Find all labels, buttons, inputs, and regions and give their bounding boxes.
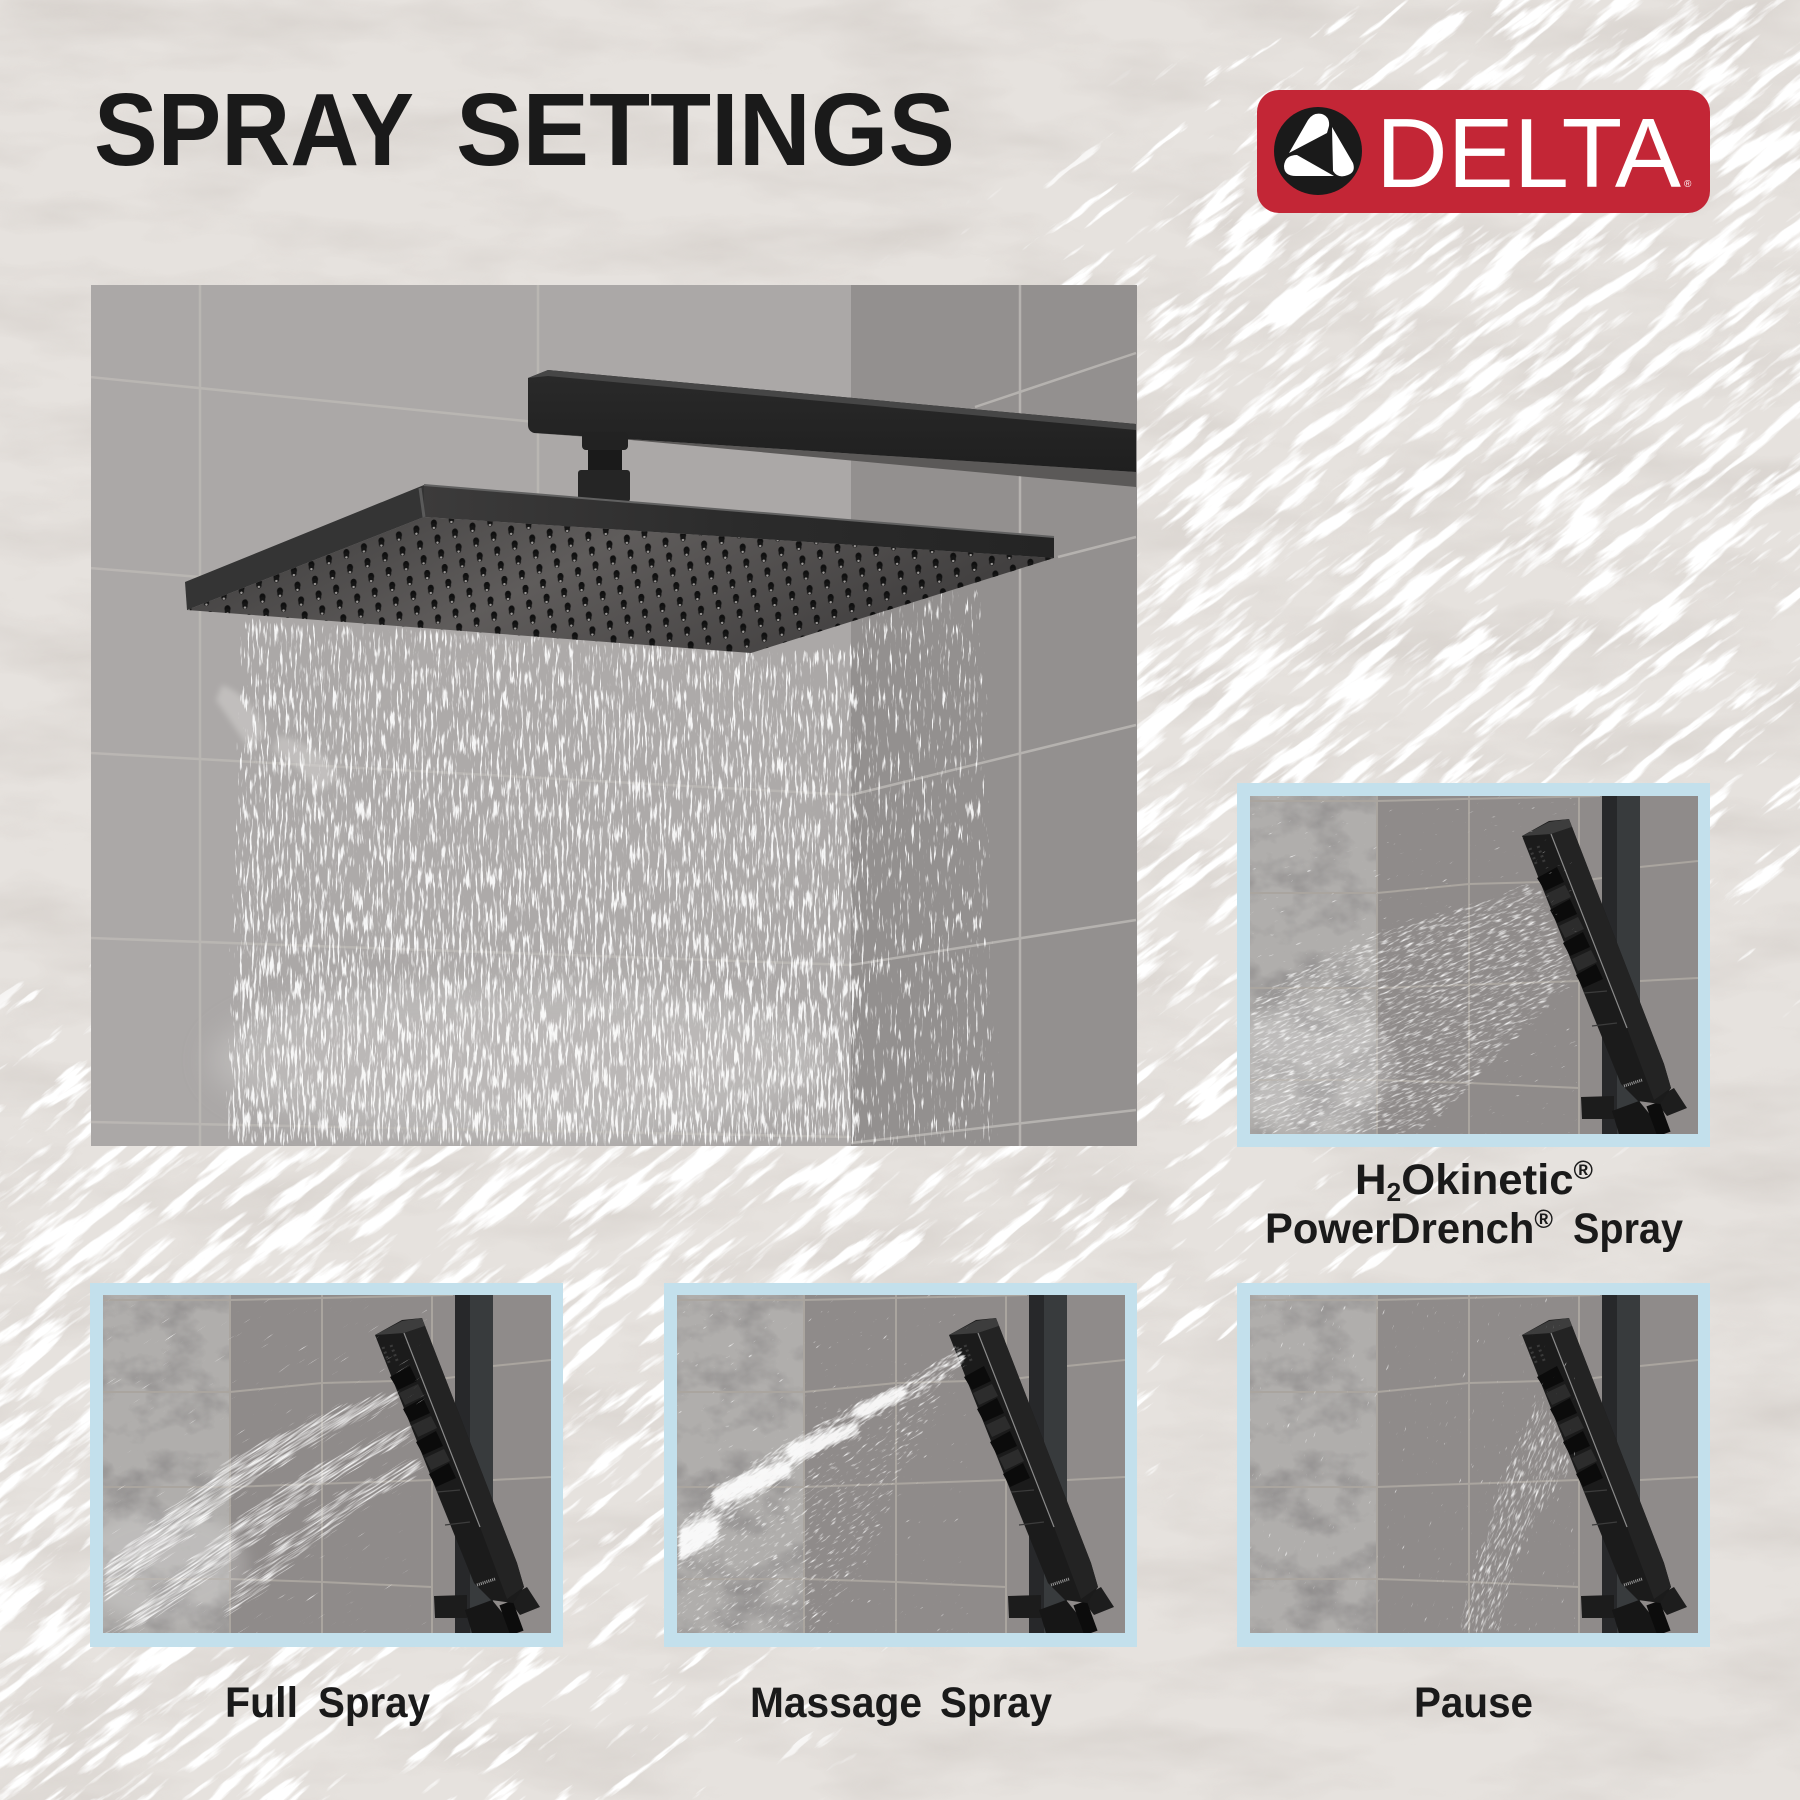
label: Full Spray bbox=[225, 1679, 430, 1727]
label: H2Okinetic PowerDrench Spray bbox=[1265, 1155, 1683, 1253]
falling water bbox=[224, 585, 1000, 1146]
label: H2Okinetic PowerDrench Spray: PowerDrench bbox=[1265, 1205, 1542, 1253]
panel: H2Okinetic PowerDrench spray bbox=[1225, 783, 1710, 1147]
title: SPRAY bbox=[94, 72, 414, 187]
trickle spray bbox=[1250, 1294, 1575, 1633]
label: H2Okinetic PowerDrench Spray: H bbox=[1355, 1156, 1386, 1204]
label: H2Okinetic PowerDrench Spray: ® bbox=[1534, 1204, 1553, 1234]
label: Full Spray: Spray bbox=[318, 1679, 430, 1727]
spray bbox=[1250, 796, 1577, 1134]
wordmark: DELTA bbox=[1376, 98, 1682, 208]
photo bbox=[78, 1294, 551, 1633]
wall reflections bbox=[216, 685, 338, 792]
panel: full spray bbox=[78, 1283, 563, 1647]
panel: pause bbox=[1237, 1283, 1710, 1647]
title bbox=[94, 72, 955, 187]
mist bbox=[1250, 1002, 1396, 1131]
label: H2Okinetic PowerDrench Spray: ® bbox=[1574, 1155, 1593, 1185]
label: Massage Spray: Massage bbox=[750, 1679, 922, 1727]
label: H2Okinetic PowerDrench Spray: Spray bbox=[1573, 1205, 1683, 1253]
stem bbox=[578, 432, 630, 502]
label: Massage Spray: Spray bbox=[940, 1679, 1052, 1727]
shower arm bbox=[528, 370, 1136, 487]
title: SETTINGS bbox=[456, 72, 955, 187]
registered mark: ® bbox=[1684, 179, 1692, 190]
photo bbox=[1225, 796, 1698, 1134]
shower head bbox=[185, 485, 1054, 653]
label: Massage Spray bbox=[750, 1679, 1052, 1727]
logo: Delta bbox=[1257, 90, 1710, 213]
photo bbox=[1250, 1294, 1698, 1633]
label: H2Okinetic PowerDrench Spray: Okinetic bbox=[1401, 1156, 1574, 1204]
mist bbox=[103, 1510, 249, 1620]
label: H2Okinetic PowerDrench Spray: 2 bbox=[1387, 1177, 1401, 1207]
photo bbox=[677, 1294, 1125, 1633]
label: Full Spray: Full bbox=[225, 1679, 298, 1727]
panel: massage spray bbox=[664, 1283, 1137, 1647]
main photo: rain shower head bbox=[90, 285, 1137, 1146]
spray jets bbox=[103, 1294, 427, 1633]
spray bbox=[677, 1294, 969, 1633]
icon: Delta triangle emblem bbox=[1274, 107, 1362, 195]
label: Pause: Pause bbox=[1414, 1679, 1533, 1727]
